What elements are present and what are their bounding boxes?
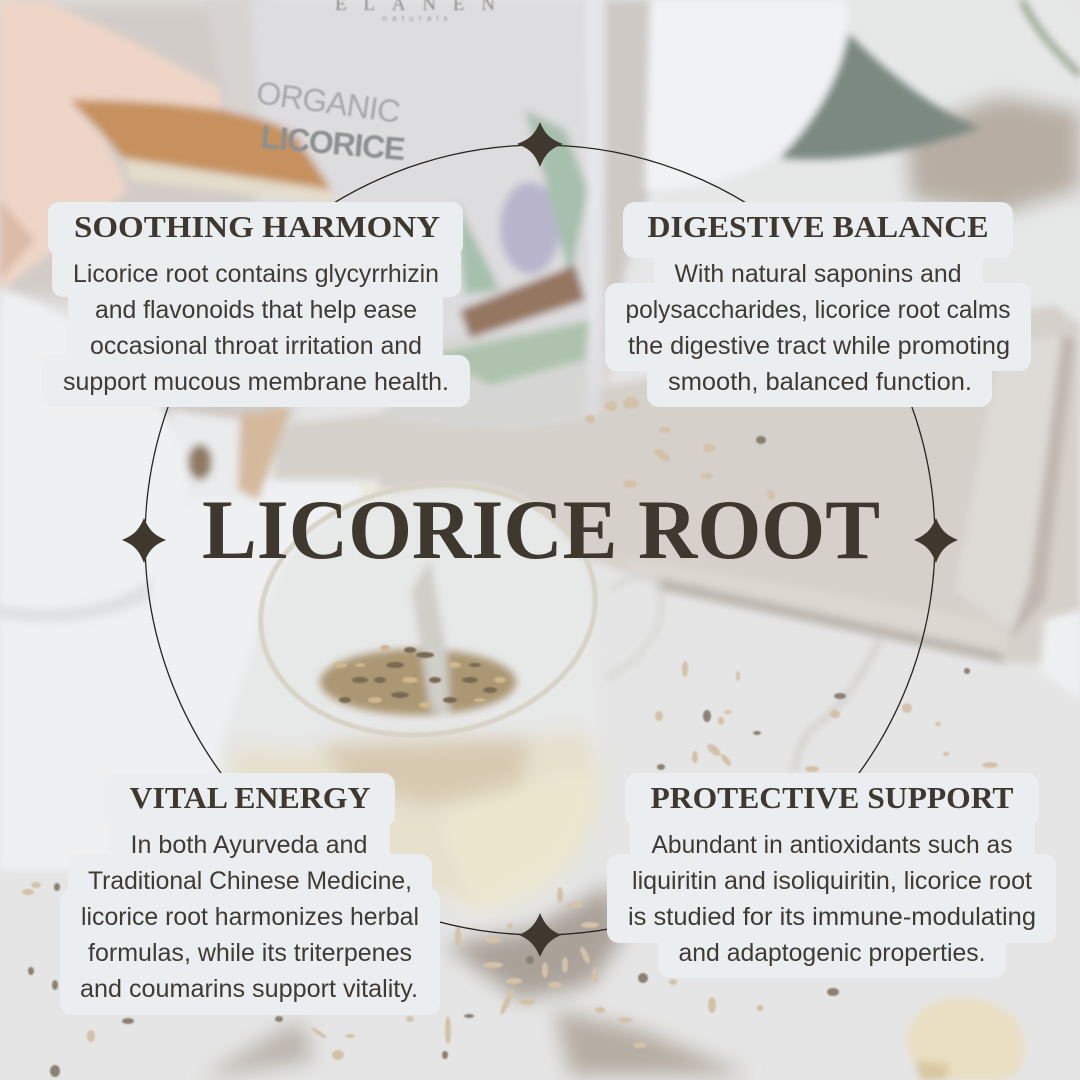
body text	[63, 260, 449, 396]
glass cup	[221, 485, 599, 920]
body text: polysaccharides, licorice root calms	[626, 296, 1010, 324]
bag lettering: ORGANIC	[254, 74, 403, 130]
tea herbs	[320, 560, 516, 715]
body text: formulas, while its triterpenes	[88, 939, 412, 967]
body text: In both Ayurveda and	[130, 831, 368, 859]
body text: licorice root harmonizes herbal	[81, 903, 419, 931]
body text	[628, 831, 1036, 967]
bag lettering: naturals	[382, 14, 448, 23]
hand	[0, 0, 222, 290]
panel: protective support	[607, 773, 1056, 978]
icon: top sparkle	[517, 122, 563, 167]
cutting board	[275, 305, 1080, 665]
title: LICORICE ROOT	[202, 483, 880, 577]
body text: and coumarins support vitality.	[80, 975, 418, 1003]
heading: PROTECTIVE SUPPORT	[650, 780, 1014, 815]
heading: DIGESTIVE BALANCE	[648, 209, 988, 244]
body text: support mucous membrane health.	[63, 368, 449, 396]
body text: With natural saponins and	[674, 260, 962, 288]
body text: liquiritin and isoliquiritin, licorice root	[632, 867, 1032, 895]
leather handle	[70, 100, 335, 195]
teapot	[0, 290, 189, 608]
body text: occasional throat irritation and	[90, 332, 422, 360]
plant stem	[1022, 0, 1080, 75]
cashew root piece	[908, 998, 1024, 1080]
body text: Traditional Chinese Medicine,	[88, 867, 412, 895]
bag lettering	[254, 0, 495, 167]
body text: Licorice root contains glycyrrhizin	[73, 260, 439, 288]
dried root specks	[22, 397, 998, 1077]
tea in cup	[232, 731, 600, 912]
body text: and flavonoids that help ease	[95, 296, 417, 324]
panel: vital energy	[60, 773, 440, 1015]
body text	[80, 831, 419, 1003]
panel: digestive balance	[605, 202, 1031, 407]
body text	[626, 260, 1010, 396]
body text: smooth, balanced function.	[668, 368, 972, 396]
decorative circle ring with four sparkles	[122, 122, 958, 957]
body text: Abundant in antioxidants such as	[652, 831, 1012, 859]
heading: SOOTHING HARMONY	[74, 209, 440, 244]
body text: and adaptogenic properties.	[678, 939, 986, 967]
icon: bottom sparkle	[519, 913, 561, 957]
bag	[205, 0, 610, 430]
botanical print	[500, 182, 560, 274]
icon: right sparkle	[914, 518, 958, 563]
white cup top right	[645, 0, 847, 190]
leaf	[780, 33, 980, 159]
marble veins	[795, 640, 880, 772]
heading: VITAL ENERGY	[130, 780, 370, 815]
body text: the digestive tract while promoting	[628, 332, 1010, 360]
body text: is studied for its immune-modulating	[628, 903, 1036, 931]
icon: left sparkle	[122, 518, 166, 563]
bag lettering: LICORICE	[259, 119, 407, 167]
panel: soothing harmony	[41, 202, 470, 407]
herb flecks	[333, 645, 506, 708]
glass handle	[605, 576, 661, 680]
glass rim	[244, 464, 612, 756]
